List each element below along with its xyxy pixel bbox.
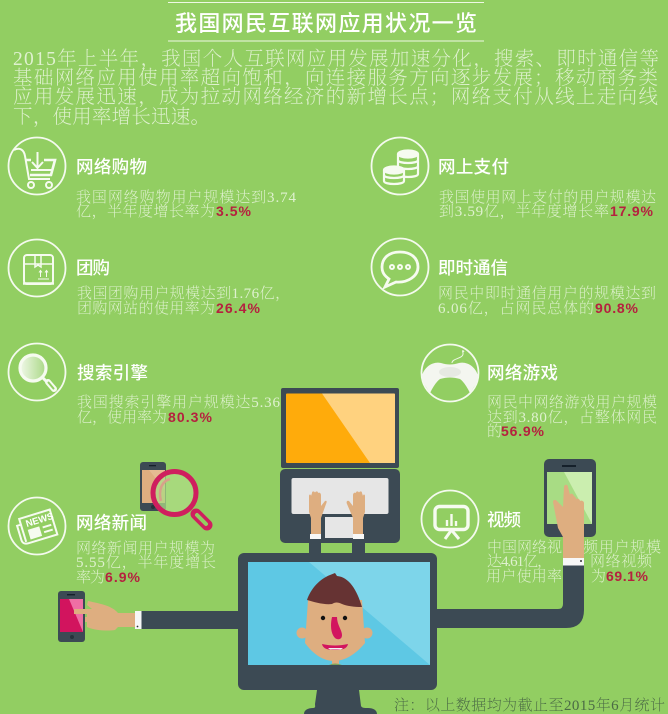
- body text: 我国搜索引擎用户规模达5.36: [77, 393, 280, 411]
- body text: [487, 394, 657, 440]
- body text: [76, 540, 216, 586]
- shirt cuffs: [310, 534, 364, 539]
- panel: video: [422, 490, 661, 585]
- intro text block: [13, 48, 659, 128]
- heading: 网上支付: [438, 157, 509, 177]
- footnote: 注：以上数据均为截止至2015年6月统计: [394, 696, 665, 714]
- body text: 90.8%: [595, 300, 639, 316]
- intro text block: 应用发展迅速，成为拉动网络经济的新增长点；网络支付从线上走向线: [13, 86, 658, 108]
- body text: 17.9%: [610, 203, 654, 219]
- hand: [74, 601, 135, 631]
- panel: online shopping: [8, 138, 296, 220]
- body text: 网民中网络游戏用户规模: [487, 394, 657, 411]
- monitor frame: [238, 553, 437, 690]
- body text: 达4.61亿，: [487, 553, 552, 570]
- intro text block: 2015年上半年，我国个人互联网应用发展加速分化，搜索、即时通信等: [13, 48, 659, 70]
- magnifier lens and handle: [153, 472, 207, 525]
- phone: [58, 591, 85, 642]
- body text: 亿，使用率为: [77, 409, 167, 426]
- body text: [486, 539, 661, 585]
- icon: game controller: [422, 344, 478, 402]
- panel: online news: [8, 498, 216, 586]
- body text: 率为: [76, 569, 105, 586]
- intro text block: 基础网络应用使用率超向饱和，向连接服务方向逐步发展；移动商务类: [13, 67, 658, 89]
- body text: [77, 285, 290, 317]
- icon: newspaper: [8, 498, 66, 554]
- body text: 我国使用网上支付的用户规模达: [439, 189, 656, 206]
- monitor stand: [304, 690, 377, 714]
- icon: shopping cart: [8, 138, 66, 194]
- body text: [77, 393, 280, 426]
- cartoon face: [296, 573, 372, 665]
- body text: 用户使用率: [486, 568, 562, 585]
- body text: 为: [591, 568, 606, 585]
- icon: speech bubble: [372, 238, 428, 296]
- body text: [438, 285, 656, 317]
- body text: 我国网络购物用户规模达到3.74: [76, 189, 296, 206]
- body text: 26.4%: [216, 300, 261, 316]
- icon: presentation board: [422, 490, 478, 548]
- body text: 6.06亿，占网民总体的: [438, 300, 594, 317]
- laptop screen: [281, 388, 399, 468]
- illustration: desktop monitor with face: [238, 553, 437, 714]
- typing hands: [309, 491, 365, 535]
- heading: 搜索引擎: [77, 363, 148, 383]
- heading: 网络游戏: [487, 363, 558, 383]
- heading: 视频: [487, 510, 521, 530]
- body text: [439, 189, 656, 220]
- icon: coins: [372, 138, 428, 194]
- illustration: right hand touching phone: [544, 459, 596, 566]
- panel: group buying: [8, 240, 290, 317]
- heading: 即时通信: [438, 258, 508, 278]
- panel: online payment: [372, 138, 656, 220]
- body text: 亿，半年度增长率为: [76, 202, 215, 220]
- heading: 网络购物: [76, 157, 147, 177]
- body text: 我国团购用户规模达到1.76亿，: [77, 285, 290, 302]
- body text: 80.3%: [168, 409, 213, 425]
- title: 我国网民互联网应用状况一览: [175, 11, 477, 36]
- body text: [76, 189, 296, 220]
- monitor screen: [248, 562, 430, 665]
- icon: newspaper: NEWS: [25, 511, 55, 530]
- hand: [553, 485, 584, 558]
- body text: 3.5%: [216, 203, 252, 219]
- icon: magnifier: [8, 344, 66, 400]
- heading: 团购: [76, 258, 110, 278]
- body text: 达到3.80亿，占整体网民: [487, 408, 657, 426]
- body text: 56.9%: [501, 423, 545, 439]
- illustration: phone with magnifier: [140, 462, 207, 525]
- shirt cuff: [563, 558, 584, 566]
- panel: online games: [422, 344, 657, 440]
- body text: 网民中即时通信用户的规模达到: [438, 285, 656, 302]
- laptop base with keyboard: [280, 469, 400, 543]
- phone: [140, 462, 166, 511]
- illustration: left hand holding phone: [58, 591, 142, 642]
- panel: instant messaging: [372, 238, 656, 317]
- body text: 6.9%: [105, 569, 141, 585]
- illustration: arms and connectors: [141, 543, 584, 629]
- icon: package box: [8, 240, 66, 296]
- body text: 到3.59亿，半年度增长率: [439, 202, 609, 220]
- shirt cuff: [135, 611, 142, 629]
- panel: search engine: [8, 344, 280, 426]
- phone: [544, 459, 596, 537]
- heading: 网络新闻: [76, 513, 147, 533]
- body text: 频用户规模: [583, 539, 661, 556]
- body text: 的: [487, 423, 502, 440]
- body text: 中国网络视: [487, 539, 562, 556]
- body text: 网络视频: [590, 553, 652, 570]
- body text: 5.55亿，半年度增长: [76, 553, 216, 571]
- intro text block: 下，使用率增长迅速。: [13, 106, 210, 128]
- body text: 团购网站的使用率为: [77, 300, 215, 317]
- illustration: laptop: [280, 388, 400, 543]
- body text: 69.1%: [606, 568, 649, 584]
- body text: 网络新闻用户规模为: [76, 540, 215, 557]
